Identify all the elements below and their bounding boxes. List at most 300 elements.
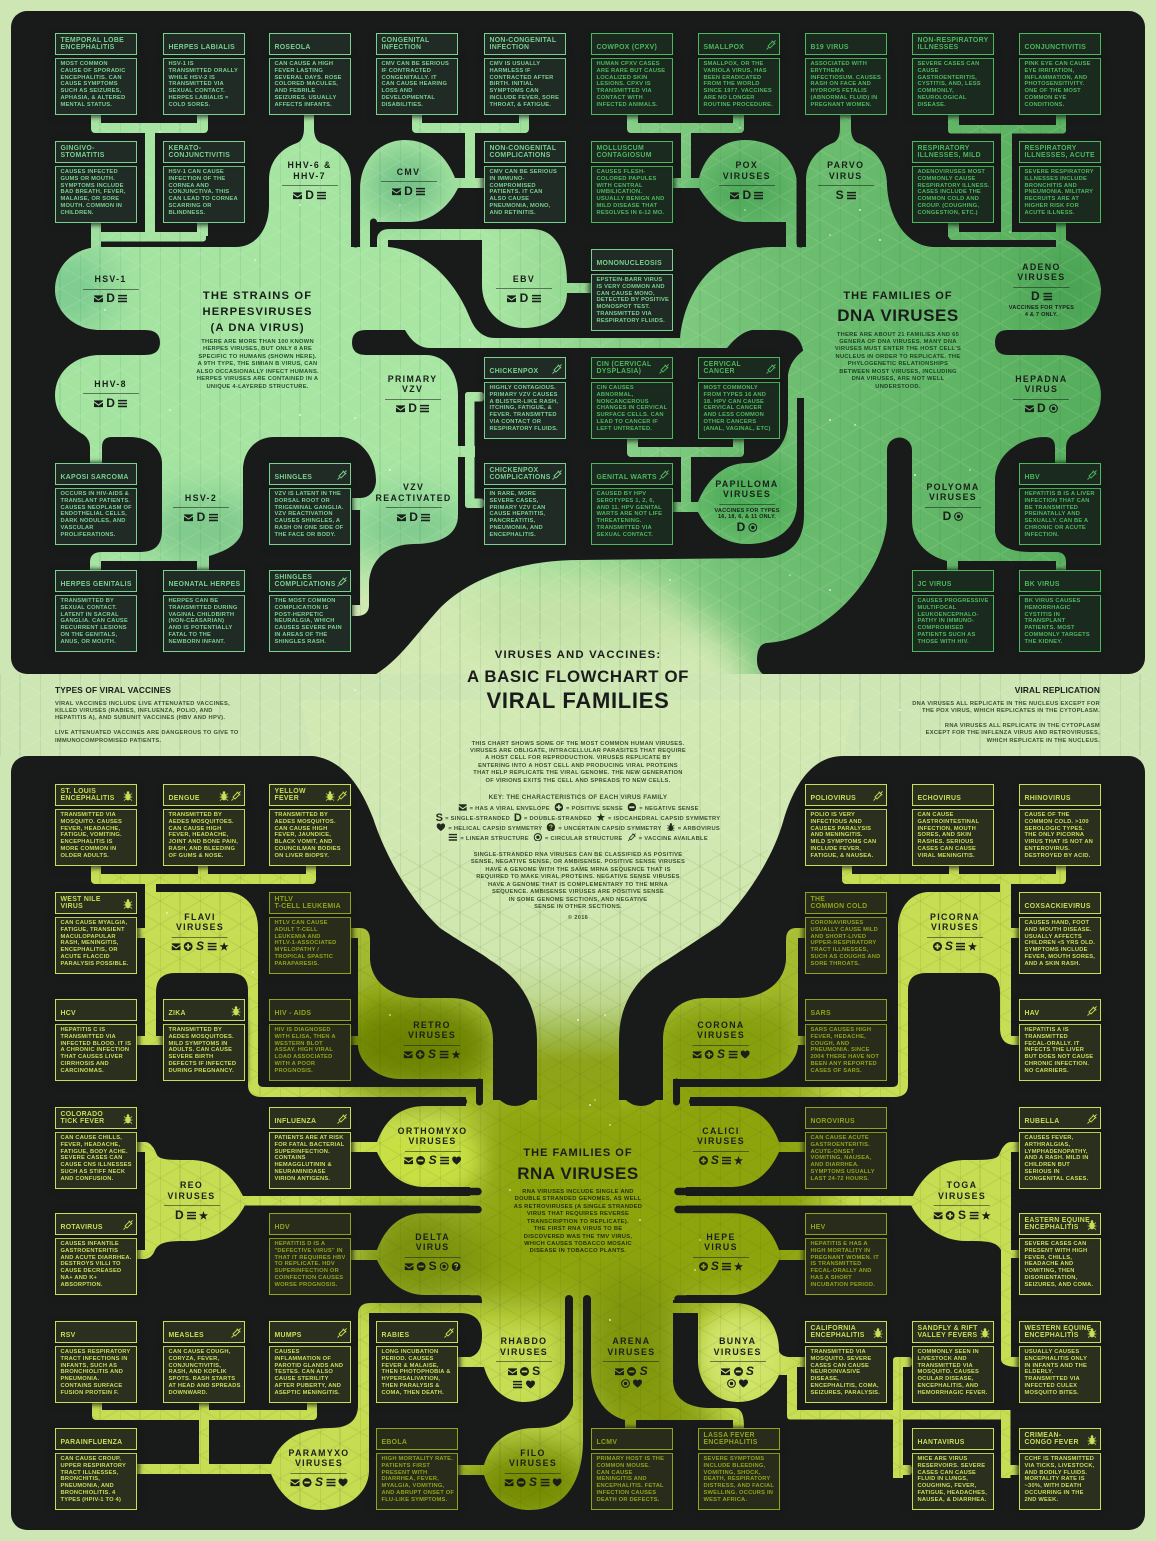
- card: Poliovirus: INCLUDE FEVER,: [810, 846, 861, 852]
- card: Crimean-Congo Fever: OCCURRING IN THE: [1024, 1490, 1084, 1496]
- card: Zika: [163, 999, 245, 1081]
- card: Non-Congenital Infection: CMV IS USUALLY: [490, 61, 540, 67]
- node: HHV-8: HHV-8: [94, 379, 127, 389]
- card: CIN (Cervical Dysplasia): SURFACE CELLS. CAN: [596, 412, 664, 418]
- card: HBV: PREINATALLY AND: [1024, 511, 1080, 517]
- card: HAV: CHRONIC INFECTION.: [1024, 1061, 1089, 1067]
- card: West Nile Virus: VIRUS: [60, 903, 83, 910]
- card: Dengue: RASH, AND BLEEDING: [168, 846, 235, 852]
- node: EBV: [496, 274, 552, 305]
- card: Mononucleosis: EPSTEIN-BARR VIRUS: [596, 277, 662, 283]
- card: Respiratory Illnesses, Mild: CASES INCLUDE THE: [918, 189, 981, 195]
- text: types of viral vaccines: VIRAL VACCINES INCLUDE LIVE ATTENUATED VACCINES,: [55, 700, 230, 706]
- node: Primary VZV: [385, 374, 441, 415]
- card: HAV: HAV: [1024, 1010, 1039, 1017]
- card: Conjunctivitis: CONJUNCTIVITIS: [1024, 44, 1086, 51]
- card: Chickenpox Complications: [484, 463, 566, 545]
- card: Kaposi Sarcoma: VASCULAR: [60, 525, 94, 531]
- card: Smallpox: FROM THE WORLD: [704, 81, 760, 87]
- heading: strains of herpesviruses: [203, 290, 313, 334]
- node: Orthomyxo viruses: S: [429, 1153, 437, 1167]
- card: Lassa Fever Encephalitis: [698, 1428, 780, 1510]
- text: types of viral vaccines: KILLED VIRUSES (RABIES, INFLUENZA, POLIO, AND: [55, 708, 213, 714]
- card: Conjunctivitis: PINK EYE CAN CAUSE: [1024, 61, 1091, 67]
- card: Chickenpox Complications: PNEUMONIA, AND: [490, 525, 543, 531]
- card: RSV: FUSION PROTEIN F.: [60, 1390, 119, 1396]
- card: Mononucleosis: MONONUCLEOSIS: [596, 260, 662, 267]
- sense explanation text: © 2016: [568, 915, 588, 921]
- card: RSV: INFANTS, SUCH AS: [60, 1363, 117, 1369]
- card: Non-Congenital Complications: [484, 141, 566, 223]
- card: Conjunctivitis: INFLAMMATION, AND: [1024, 75, 1087, 81]
- card: JC Virus: PATIENTS SUCH AS: [918, 632, 976, 638]
- card: Kaposi Sarcoma: CAUSES NEOPLASM OF: [60, 505, 132, 511]
- card: HDV: "DEFECTIVE VIRUS" IN: [274, 1248, 343, 1254]
- card: HTLV T-Cell Leukemia: MYELOPATHY /: [274, 947, 319, 953]
- card: Respiratory Illnesses, Acute: PNEUMONIA. MILITARY: [1024, 189, 1093, 195]
- node: Bunya viruses: S: [746, 1364, 754, 1378]
- text: types of viral vaccines: LIVE ATTENUATED VACCINES ARE DANGEROUS TO GIVE TO: [55, 730, 239, 736]
- text: herpesviruses description: HERPES VIRUSES, BUT ONLY 8 ARE: [203, 346, 312, 352]
- card: BK Virus: BK VIRUS: [1024, 581, 1060, 588]
- card: Chickenpox: ITCHING, FATIGUE, &: [490, 405, 552, 411]
- node: Corona viruses: [692, 1020, 750, 1061]
- card: LCMV: [591, 1428, 673, 1510]
- card: Genital Warts: SEROTYPES 1, 2, 6,: [596, 498, 654, 504]
- card: Eastern Equine Encephalitis: DISORIENTATION,: [1024, 1275, 1077, 1281]
- card: Rubella: SERIOUS IN: [1024, 1169, 1060, 1175]
- card: Molluscum Contagiosum: CAUSES FLESH-: [596, 169, 645, 175]
- node: Papilloma viruses: 16, 18, 6, & 11 ONLY.: [718, 514, 776, 520]
- card: Non-Congenital Complications: PATIENTS. IT CAN: [490, 189, 543, 195]
- card: Cervical Cancer: FROM TYPES 16 AND: [704, 392, 766, 398]
- card: Smallpox: BEEN ERADICATED: [704, 75, 761, 81]
- card: Rabies: [376, 1321, 458, 1403]
- card: Keratoconjunctivitis: CONJUNCTIVA. THIS: [168, 189, 229, 195]
- card: Respiratory Illnesses, Mild: ILLNESSES, MILD: [918, 152, 981, 159]
- card: Mumps: CAUSE STERILITY: [274, 1376, 329, 1382]
- card: Shingles Complications: CAUSES SEVERE PAIN: [274, 625, 342, 631]
- card: Ebola: PATIENTS FIRST: [382, 1463, 430, 1469]
- card: Mononucleosis: RESPIRATORY FLUIDS.: [596, 318, 665, 324]
- card: Kaposi Sarcoma: OCCURS IN HIV-AIDS &: [60, 491, 129, 497]
- card: Neonatal Herpes: HERPES CAN BE: [168, 598, 218, 604]
- node: HHV-6 and HHV-7: HHV-6 &: [288, 160, 332, 170]
- card: Parainfluenza: CAN CAUSE CROUP,: [60, 1456, 121, 1462]
- card: JC Virus: JC VIRUS: [918, 581, 952, 588]
- text: DNA viruses description: PHYLOGENETIC RELATIONSHIPS: [848, 361, 948, 367]
- card: Gingivostomatitis: CHILDREN.: [60, 210, 94, 216]
- sense explanation text: SENSE, NEGATIVE SENSE, OR AMBISENSE. POSITIVE SENSE VIRUSES: [471, 859, 685, 865]
- card: SARS: SARS CAUSES HIGH: [810, 1027, 871, 1033]
- text: viral replication: EXCEPT FOR THE INFLENZA VIRUS AND RETROVIRUSES,: [926, 730, 1100, 736]
- card: Measles: AT HEAD AND SPREADS: [168, 1383, 241, 1389]
- card: Norovirus: [805, 1107, 887, 1189]
- node: Reo viruses: [164, 1180, 220, 1222]
- card: BK Virus: HEMORRHAGIC: [1024, 605, 1071, 611]
- node: Bunya viruses: [710, 1336, 766, 1388]
- node: Arena viruses: VIRUSES: [607, 1347, 655, 1357]
- card: The Common Cold: USUALLY CAUSE MILD: [810, 927, 878, 933]
- node: Calici viruses: [693, 1126, 749, 1167]
- card: B19 Virus: HYDROPS FETALIS: [810, 88, 867, 94]
- node: Paramyxo viruses: S: [315, 1475, 323, 1489]
- node: Retro viruses: RETRO: [413, 1020, 451, 1030]
- card: Measles: [163, 1321, 245, 1403]
- card: Gingivostomatitis: [55, 141, 137, 223]
- node: HHV-8: [83, 379, 139, 410]
- card: Western Equine Encephalitis: IN INFANTS AND THE: [1024, 1363, 1087, 1369]
- card: HBV: BE TRANSMITTED: [1024, 505, 1078, 511]
- heading: families of DNA viruses: [837, 290, 959, 325]
- card: Shingles: CAUSES SHINGLES, A: [274, 518, 340, 524]
- card: Conjunctivitis: [1019, 33, 1101, 115]
- card: HIV - AIDS: WITH ELISA, THEN A: [274, 1034, 336, 1040]
- text: herpesviruses description: [196, 339, 319, 390]
- card: HTLV T-Cell Leukemia: ADULT T-CELL: [274, 927, 318, 933]
- card: Echovirus: ECHOVIRUS: [918, 795, 961, 802]
- card: HEV: HEPATITIS E HAS A: [810, 1241, 868, 1247]
- text: herpesviruses description: ALSO OCCASIONALLY INFECT HUMANS.: [196, 369, 319, 375]
- card: Measles: RASH, AND KOPLIK: [168, 1369, 227, 1375]
- card: Norovirus: NOROVIRUS: [810, 1118, 855, 1125]
- card: Rabies: HYPERSALIVATION,: [382, 1376, 440, 1382]
- heading: families of RNA viruses: [517, 1147, 639, 1182]
- card: Cervical Cancer: (ANAL, VAGINAL, ETC): [704, 426, 771, 432]
- node: Papilloma viruses: VACCINES FOR TYPES: [714, 508, 780, 514]
- card: Cowpox: LOCALIZED SKIN: [596, 75, 648, 81]
- card: BK Virus: CYSTITIS IN: [1024, 612, 1060, 618]
- heading line: the families of: THE FAMILIES OF: [523, 1147, 633, 1159]
- card: Lassa Fever Encephalitis: INCLUDE BLEEDING,: [704, 1463, 765, 1469]
- node: Filo viruses: [505, 1448, 561, 1487]
- node: Rhabdo viruses: [496, 1336, 552, 1388]
- intro text: ENTERING INTO A HOST CELL AND PRODUCING VIRAL PROTEINS: [478, 763, 678, 769]
- card: HIV - AIDS: HIV - AIDS: [274, 1010, 311, 1017]
- card: Dengue: OF GUMS & NOSE.: [168, 852, 224, 858]
- card: RSV: TRACT INFECTIONS IN: [60, 1356, 128, 1362]
- card: Sandfly and Rift Valley Fevers: ENCEPHALITIS, AND: [918, 1383, 979, 1389]
- text: RNA viruses description: DISCOVERED WAS THE TMV VIRUS,: [524, 1234, 632, 1240]
- card: Shingles: SHINGLES: [274, 474, 312, 481]
- text: RNA viruses description: THE FIRST RNA VIRUS TO BE: [534, 1226, 622, 1232]
- card: The Common Cold: SUCH AS COUGHS AND: [810, 954, 880, 960]
- node: Parvo virus: S: [836, 188, 844, 202]
- card: HCV: HEPATITIS C IS: [60, 1027, 105, 1033]
- card: Chickenpox: FEVER. TRANSMITTED: [490, 412, 557, 418]
- card: Coxsackievirus: COXSACKIEVIRUS: [1024, 903, 1091, 910]
- title block: [467, 648, 689, 713]
- card: LCMV: DEATH OR DEFECTS.: [596, 1496, 660, 1502]
- card: Poliovirus: [805, 784, 887, 866]
- node: Polyoma viruses: [925, 482, 981, 523]
- card: Chickenpox Complications: IN RARE, MORE: [490, 491, 536, 497]
- card: Non-Congenital Infection: SYMPTOMS CAN: [490, 88, 539, 94]
- card: Shingles: TRIGEMINAL GANGLIA.: [274, 505, 344, 511]
- card: The Common Cold: AND SHORT-LIVED: [810, 934, 866, 940]
- node: Hepadna virus: HEPADNA: [1015, 374, 1068, 384]
- card: Respiratory Illnesses, Acute: RECRUITS ARE AT: [1024, 196, 1079, 202]
- card: Smallpox: [698, 33, 780, 115]
- card: Influenza: PATIENTS ARE AT RISK: [274, 1135, 344, 1141]
- node: Rhabdo viruses: S: [532, 1364, 540, 1378]
- card: Measles: DOWNWARD.: [168, 1390, 208, 1396]
- card: Respiratory Illnesses, Mild: CROUP. (COUGHING,: [918, 203, 979, 209]
- node: Filo viruses: S: [529, 1475, 537, 1489]
- card: HBV: [1019, 463, 1101, 545]
- card: Neonatal Herpes: AND IS POTENTIALLY: [168, 625, 233, 631]
- card: Dengue: FEVER, HEADACHE,: [168, 832, 228, 838]
- text: RNA viruses description: DOUBLE STRANDED GENOMES, AS WELL: [515, 1196, 641, 1202]
- card: Rubella: CHILDREN BUT: [1024, 1162, 1070, 1168]
- card: California Encephalitis: [805, 1321, 887, 1403]
- node: Delta virus: VIRUS: [416, 1242, 449, 1252]
- card: Hantavirus: FLUID IN LUNGS,: [918, 1476, 968, 1482]
- card: HDV: [269, 1213, 351, 1295]
- node: Delta virus: [404, 1232, 461, 1273]
- card: HBV: HEPATITIS B IS A LIVER: [1024, 491, 1095, 497]
- card: Hantavirus: FATIGUE, HEADACHES,: [918, 1490, 987, 1496]
- card: Mumps: [269, 1321, 351, 1403]
- card: HIV - AIDS: WESTERN BLOT: [274, 1041, 323, 1047]
- card: HEV: INCUBATION PERIOD.: [810, 1282, 875, 1288]
- card: Rhinovirus: CAUSE OF THE: [1024, 812, 1070, 818]
- node: Primary VZV: D: [408, 401, 417, 415]
- card: Conjunctivitis: EYE IRRITATION,: [1024, 68, 1074, 74]
- card: Rhinovirus: ENTEROVIRUS.: [1024, 846, 1070, 852]
- card: Coxsackievirus: USUALLY AFFECTS: [1024, 934, 1082, 940]
- card: Non-Respiratory Illnesses: COMMONLY,: [918, 88, 954, 94]
- card: Rubella: AND A RASH. MILD IN: [1024, 1155, 1089, 1161]
- intro text: VIRUSES ARE OBLIGATE, INTRACELLULAR PARASITES THAT REQUIRE: [470, 748, 686, 754]
- card: Influenza: INFLUENZA: [274, 1118, 316, 1125]
- card: Crimean-Congo Fever: CCHF IS TRANSMITTED: [1024, 1456, 1094, 1462]
- card: Sandfly and Rift Valley Fevers: LIVESTOCK AND: [918, 1356, 967, 1362]
- card: Lassa Fever Encephalitis: SWELLING. OCCURS IN: [704, 1490, 773, 1496]
- card: Smallpox: VARIOLA VIRUS, HAS: [704, 68, 767, 74]
- card: Mononucleosis: [591, 249, 673, 331]
- card: Dengue: TRANSMITTED BY: [168, 812, 222, 818]
- card: Mumps: AFTER PUBERTY, AND: [274, 1383, 341, 1389]
- card: Herpes Labialis: TRANSMITTED VIA: [168, 81, 224, 87]
- node: Corona viruses: VIRUSES: [697, 1030, 745, 1040]
- card: Non-Congenital Complications: CMV CAN BE SERIOUS: [490, 169, 557, 175]
- card: Ebola: HIGH MORTALITY RATE.: [382, 1456, 453, 1462]
- card: St. Louis Encephalitis: [55, 784, 137, 866]
- card: The Common Cold: [805, 892, 887, 974]
- heading line: RNA viruses: RNA VIRUSES: [517, 1164, 639, 1182]
- card: Herpes Genitalis: RECURRENT LESIONS: [60, 625, 127, 631]
- card: HEV: IS TRANSMITTED: [810, 1261, 862, 1267]
- node: Flavi viruses: VIRUSES: [176, 922, 224, 932]
- card: Herpes Labialis: HERPES LABIALIS =: [168, 95, 229, 101]
- node: Pox viruses: POX: [735, 160, 758, 170]
- card: Respiratory Illnesses, Acute: BRONCHITIS AND: [1024, 183, 1077, 189]
- card: Molluscum Contagiosum: WITH CENTRAL: [596, 183, 643, 189]
- card: Molluscum Contagiosum: [591, 141, 673, 223]
- card: CIN (Cervical Dysplasia): CIN CAUSES: [596, 385, 634, 391]
- card: Zika: DEFECTS IF INFECTED: [168, 1061, 236, 1067]
- node: CMV: CMV: [397, 167, 420, 177]
- card: Respiratory Illnesses, Mild: [912, 141, 994, 223]
- node: EBV: D: [520, 291, 528, 305]
- card: RSV: PNEUMONIA.: [60, 1376, 99, 1382]
- card: Smallpox: ARE NO LONGER: [704, 95, 755, 101]
- card: Eastern Equine Encephalitis: FEVER, CHILLS,: [1024, 1255, 1072, 1261]
- text: RNA viruses description: RNA VIRUSES INCLUDE SINGLE AND: [522, 1189, 634, 1195]
- card: Echovirus: CASES CAN CAUSE: [918, 846, 976, 852]
- card: Herpes Labialis: SEXUAL CONTACT.: [168, 88, 225, 94]
- text: viral replication: DNA VIRUSES ALL REPLICATE IN THE NUCLEUS EXCEPT FOR: [912, 700, 1100, 706]
- card: Western Equine Encephalitis: ELDERLY.: [1024, 1369, 1053, 1375]
- node: Paramyxo viruses: PARAMYXO: [289, 1448, 349, 1458]
- node: Flavi viruses: S: [196, 939, 204, 953]
- node: Delta virus: DELTA: [415, 1232, 450, 1242]
- card: HBV: CHRONIC OR ACUTE: [1024, 525, 1086, 531]
- card: Norovirus: LAST 24-72 HOURS.: [810, 1176, 869, 1182]
- card: Herpes Labialis: HERPES LABIALIS: [168, 44, 235, 51]
- card: Keratoconjunctivitis: BLINDNESS.: [168, 210, 205, 216]
- card: Crimean-Congo Fever: VIA TICKS, LIVESTOCK,: [1024, 1463, 1095, 1469]
- card: Influenza: SUPERINFECTION.: [274, 1149, 330, 1155]
- node: VZV Reactivated: [376, 482, 452, 524]
- title: Viruses and Vaccines: VIRUSES AND VACCINES:: [495, 648, 661, 660]
- card: Keratoconjunctivitis: SCARRING OR: [168, 203, 212, 209]
- card: Ebola: FLU-LIKE SYMPTOMS.: [382, 1496, 447, 1502]
- card: B19 Virus: INFECTIOSUM. CAUSES: [810, 75, 881, 81]
- card: Norovirus: AND DIARRHEA.: [810, 1162, 859, 1168]
- text: herpesviruses description: A 9TH TYPE, THE SIMIAN B VIRUS, CAN: [198, 361, 317, 367]
- card: Chickenpox: PRIMARY VZV CAUSES: [490, 392, 558, 398]
- card: Kaposi Sarcoma: DARK NODULES, AND: [60, 518, 126, 524]
- card: California Encephalitis: MOSQUITO. SEVERE: [810, 1356, 871, 1362]
- card: Influenza: FOR FATAL BACTERIAL: [274, 1142, 344, 1148]
- card: LCMV: INFECTION CAUSES: [596, 1490, 656, 1496]
- card: Chickenpox: HIGHLY CONTAGIOUS.: [490, 385, 556, 391]
- card: HBV: HBV: [1024, 474, 1040, 481]
- card: Western Equine Encephalitis: ENCEPHALITIS ONLY: [1024, 1356, 1087, 1362]
- card: Gingivostomatitis: MALAISE, OR SORE: [60, 196, 119, 202]
- card: CIN (Cervical Dysplasia): DYSPLASIA): [596, 368, 641, 375]
- card: Parainfluenza: [55, 1428, 137, 1510]
- card: Gingivostomatitis: STOMATITIS: [60, 152, 105, 159]
- card: Cervical Cancer: 18. HPV CAN CAUSE: [704, 399, 764, 405]
- node: Filo viruses: FILO: [520, 1448, 546, 1458]
- node: Reo viruses: D: [175, 1208, 184, 1222]
- card: HDV: COINFECTION CAUSES: [274, 1275, 343, 1281]
- card: Non-Congenital Complications: COMPLICATIONS: [490, 152, 551, 159]
- text: RNA viruses description: TRANSCRIPTION TO REPLICATE).: [527, 1219, 629, 1225]
- card: Herpes Genitalis: ANUS, OR MOUTH.: [60, 638, 116, 644]
- card: Influenza: NEURAMINIDASE: [274, 1169, 326, 1175]
- card: Sandfly and Rift Valley Fevers: TRANSMITTED VIA: [918, 1363, 973, 1369]
- card: Neonatal Herpes: FATAL TO THE: [168, 632, 211, 638]
- card: HAV: FECAL-ORALLY. IT: [1024, 1041, 1080, 1047]
- card: Yellow Fever: ON LIVER BIOPSY.: [274, 852, 329, 858]
- card: JC Virus: COMPROMISED: [918, 625, 964, 631]
- node: Pox viruses: [719, 160, 775, 202]
- card: HTLV T-Cell Leukemia: TROPICAL SPASTIC: [274, 954, 333, 960]
- card: Dengue: DENGUE: [168, 795, 200, 802]
- card: Parainfluenza: BRONCHITIS,: [60, 1476, 100, 1482]
- card: Zika: ZIKA: [168, 1010, 186, 1017]
- card: Chickenpox Complications: PANCREATITIS,: [490, 518, 535, 524]
- card: RSV: CAUSES RESPIRATORY: [60, 1349, 130, 1355]
- node: Bunya viruses: BUNYA: [719, 1336, 756, 1346]
- card: Hantavirus: RESERVOIRS. SEVERE: [918, 1463, 985, 1469]
- card: St. Louis Encephalitis: MOSQUITO. CAUSES: [60, 819, 122, 825]
- node: Papilloma viruses: VIRUSES: [723, 489, 771, 499]
- card: SARS: PNEUMONIA. SINCE: [810, 1047, 870, 1053]
- card: California Encephalitis: DISEASE,: [810, 1376, 839, 1382]
- card: Chickenpox Complications: CHICKENPOX: [490, 467, 538, 474]
- text: herpesviruses description: UNIQUE 4-LAYERED STRUCTURE.: [206, 384, 309, 390]
- card: JC Virus: MULTIFOCAL: [918, 605, 956, 611]
- card: Influenza: CONTAINS: [274, 1155, 306, 1161]
- card: HDV: THAT IT REQUIRES HBV: [274, 1255, 345, 1261]
- card: Molluscum Contagiosum: CONTAGIOSUM: [596, 152, 652, 159]
- card: Herpes Genitalis: HERPES GENITALIS: [60, 581, 132, 588]
- card: Kaposi Sarcoma: [55, 463, 137, 545]
- card: Yellow Fever: TRANSMITTED BY: [274, 812, 328, 818]
- card: Zika: TRANSMITTED BY: [168, 1027, 222, 1033]
- card: Rabies: THEN PHOTOPHOBIA &: [382, 1369, 451, 1375]
- card: Shingles: VZV REACTIVATION: [274, 511, 333, 517]
- card: Non-Respiratory Illnesses: NON-RESPIRATORY: [918, 37, 988, 44]
- node: Reo viruses: VIRUSES: [167, 1191, 216, 1201]
- text: types of viral vaccines: IMMUNOCOMPROMISED PATIENTS.: [55, 738, 161, 744]
- card: Yellow Fever: YELLOW: [274, 788, 306, 795]
- card: Roseola: FEVER LASTING: [274, 68, 323, 74]
- card: LCMV: COMMON MOUSE.: [596, 1463, 650, 1469]
- card: B19 Virus: RASH ON FACE AND: [810, 81, 871, 87]
- card: HIV - AIDS: [269, 999, 351, 1081]
- card: BK Virus: COMMONLY TARGETS: [1024, 632, 1090, 638]
- card: Temporal Lobe Encephalitis: TEMPORAL LOBE: [60, 37, 124, 44]
- card: Yellow Fever: FEVER: [274, 795, 299, 802]
- card: HEV: [805, 1213, 887, 1295]
- node: Arena viruses: S: [640, 1364, 648, 1378]
- key: characteristics of each virus family: KEY: THE CHARACTERISTICS OF EACH VIRUS FAMILY: [489, 794, 667, 800]
- node: Retro viruses: [404, 1020, 460, 1061]
- card: Sandfly and Rift Valley Fevers: [912, 1321, 994, 1403]
- card: Temporal Lobe Encephalitis: APHASIA, & ALTERED: [60, 95, 125, 101]
- card: HCV: CARCINOMAS.: [60, 1068, 104, 1074]
- card: CIN (Cervical Dysplasia): [591, 357, 673, 439]
- card: Shingles: DORSAL ROOT OR: [274, 498, 330, 504]
- card: California Encephalitis: CASES CAN CAUSE: [810, 1363, 869, 1369]
- card: Neonatal Herpes: NEWBORN INFANT.: [168, 638, 225, 644]
- card: CIN (Cervical Dysplasia): LEAD TO CANCER IF: [596, 419, 658, 425]
- card: Coxsackievirus: AND A SKIN RASH.: [1024, 960, 1080, 966]
- card: Western Equine Encephalitis: INFECTED CULEX: [1024, 1383, 1077, 1389]
- card: Neonatal Herpes: NEONATAL HERPES: [168, 581, 240, 588]
- card: HTLV T-Cell Leukemia: HTLV CAN CAUSE: [274, 920, 328, 926]
- card: Roseola: [269, 33, 351, 115]
- card: Mononucleosis: IS VERY COMMON AND: [596, 284, 665, 290]
- card: Western Equine Encephalitis: WESTERN EQUINE: [1024, 1325, 1092, 1332]
- title: A Basic Flowchart of: A BASIC FLOWCHART OF: [467, 667, 689, 686]
- sense explanation text: SENSE IN OTHER SECTIONS.: [534, 904, 622, 910]
- card: Respiratory Illnesses, Acute: ILLNESSES, ACUTE: [1024, 152, 1095, 159]
- node: VZV Reactivated: D: [409, 510, 418, 524]
- card: Cervical Cancer: MOST COMMONLY: [704, 385, 758, 391]
- card: Echovirus: VIRAL MENINGITIS.: [918, 852, 975, 858]
- card: SARS: CASES OF SARS.: [810, 1068, 862, 1074]
- card: Cowpox: HUMAN CPXV CASES: [596, 61, 660, 67]
- card: Poliovirus: INFECTIOUS AND: [810, 819, 862, 825]
- card: Respiratory Illnesses, Mild: COMMONLY CAUSE: [918, 176, 976, 182]
